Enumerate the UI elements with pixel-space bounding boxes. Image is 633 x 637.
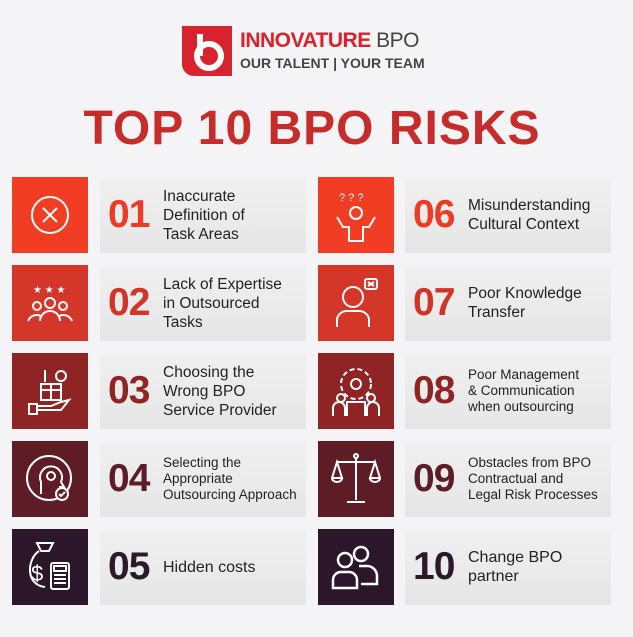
item 02: 02 [108, 281, 149, 324]
title: TOP 10 BPO RISKS [83, 102, 541, 155]
item 05: Hidden costs [163, 558, 256, 576]
item 03: Choosing the [163, 364, 254, 380]
item 04: Selecting the [163, 455, 241, 470]
item 09: Legal Risk Processes [468, 487, 598, 502]
icon: box in hand [12, 353, 88, 429]
item 03: 03 [108, 369, 149, 412]
item 10: 10 [413, 545, 454, 588]
item 08: when outsourcing [468, 399, 574, 414]
item 04: Outsourcing Approach [163, 487, 297, 502]
item 10 [318, 529, 611, 605]
item 07: Transfer [468, 304, 525, 321]
item 01: Inaccurate [163, 188, 235, 204]
item 09 [318, 441, 611, 517]
item 01: 01 [108, 193, 149, 236]
icon: money bag calculator [12, 529, 88, 605]
item 09: Obstacles from BPO [468, 455, 591, 470]
icon: person with speech [318, 265, 394, 341]
icon: two people [318, 529, 394, 605]
item 10: Change BPO [468, 549, 562, 566]
item 08: 08 [413, 369, 454, 412]
item 03: Wrong BPO [163, 382, 245, 400]
item 07: Poor Knowledge [468, 285, 582, 302]
item 10: partner [468, 568, 519, 585]
icon: x circle [12, 177, 88, 253]
item 08 [318, 353, 611, 429]
item 01: Task Areas [163, 226, 239, 242]
icon: confused person: ? ? ? [339, 192, 363, 204]
item 02 [12, 265, 306, 341]
item 01 [12, 177, 306, 253]
item 03: Service Provider [163, 402, 277, 418]
item 07 [318, 265, 611, 341]
item 05 [12, 529, 306, 605]
tagline: OUR TALENT | YOUR TEAM [240, 55, 425, 71]
item 02: in Outsourced [163, 294, 260, 312]
item 06 [318, 177, 611, 253]
brand name: INNOVATURE BPO [240, 29, 419, 52]
item 02: Tasks [163, 314, 203, 330]
item 04 [12, 441, 306, 517]
item 06: 06 [413, 193, 454, 236]
item 04: Appropriate [163, 471, 233, 486]
item 06: Misunderstanding [468, 197, 590, 214]
item 09: 09 [413, 457, 454, 500]
item 07: 07 [413, 281, 454, 324]
icon: scales [318, 441, 394, 517]
item 09: Contractual and [468, 471, 563, 486]
icon: money bag calculator: $ [31, 561, 43, 586]
icon: head gear check [12, 441, 88, 517]
logo [182, 26, 425, 76]
icon: confused person [318, 177, 394, 253]
icon: gear team [318, 353, 394, 429]
item 08: & Communication [468, 383, 575, 398]
item 01: Definition of [163, 206, 245, 224]
item 08: Poor Management [468, 367, 579, 382]
item 05: 05 [108, 545, 149, 588]
logo mark [182, 26, 232, 76]
item 03 [12, 353, 306, 429]
icon: team stars: ★ ★ ★ [33, 285, 65, 296]
item 02: Lack of Expertise [163, 276, 282, 292]
item 04: 04 [108, 457, 149, 500]
icon: team stars [12, 265, 88, 341]
item 06: Cultural Context [468, 216, 579, 233]
